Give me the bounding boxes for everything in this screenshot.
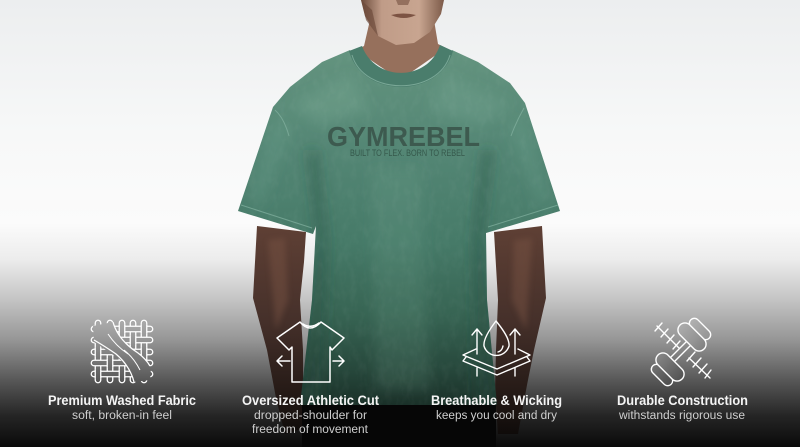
t-shirt xyxy=(230,45,570,405)
description: keeps you cool and dry xyxy=(436,410,557,422)
feature: breathable and wicking xyxy=(431,321,562,422)
model: left arm xyxy=(253,226,306,434)
description: withstands rigorous use xyxy=(618,410,745,422)
feature: oversized athletic cut: freedom of movement xyxy=(252,424,369,436)
heading: Oversized Athletic Cut xyxy=(242,393,379,408)
description: dropped-shoulder for xyxy=(254,410,367,422)
feature: durable construction xyxy=(617,316,748,422)
icon: t-shirt with arrows xyxy=(277,322,344,382)
heading: Premium Washed Fabric xyxy=(48,393,196,408)
model: neck xyxy=(356,20,446,80)
icon: moisture wicking layers xyxy=(463,321,530,376)
feature: premium washed fabric xyxy=(48,322,196,422)
shirt tagline: BUILT TO FLEX. BORN TO REBEL xyxy=(350,148,465,158)
model: face and jaw xyxy=(361,0,444,45)
shirt logo: GYMREBEL: GYMREBEL xyxy=(327,121,480,152)
shirt collar xyxy=(349,45,453,87)
heading: Durable Construction xyxy=(617,393,748,408)
heading: Breathable & Wicking xyxy=(431,393,562,408)
shirt body and sleeves xyxy=(238,50,560,405)
icon: crossed dumbbell and stitches xyxy=(649,316,713,388)
model: right arm xyxy=(494,226,546,434)
dark trousers xyxy=(302,405,496,447)
sleeve seams and hems xyxy=(241,108,558,228)
description: soft, broken-in feel xyxy=(72,410,172,422)
feature: oversized athletic cut xyxy=(242,322,379,436)
icon: woven fabric xyxy=(93,322,151,382)
shirt shading folds xyxy=(252,78,548,405)
